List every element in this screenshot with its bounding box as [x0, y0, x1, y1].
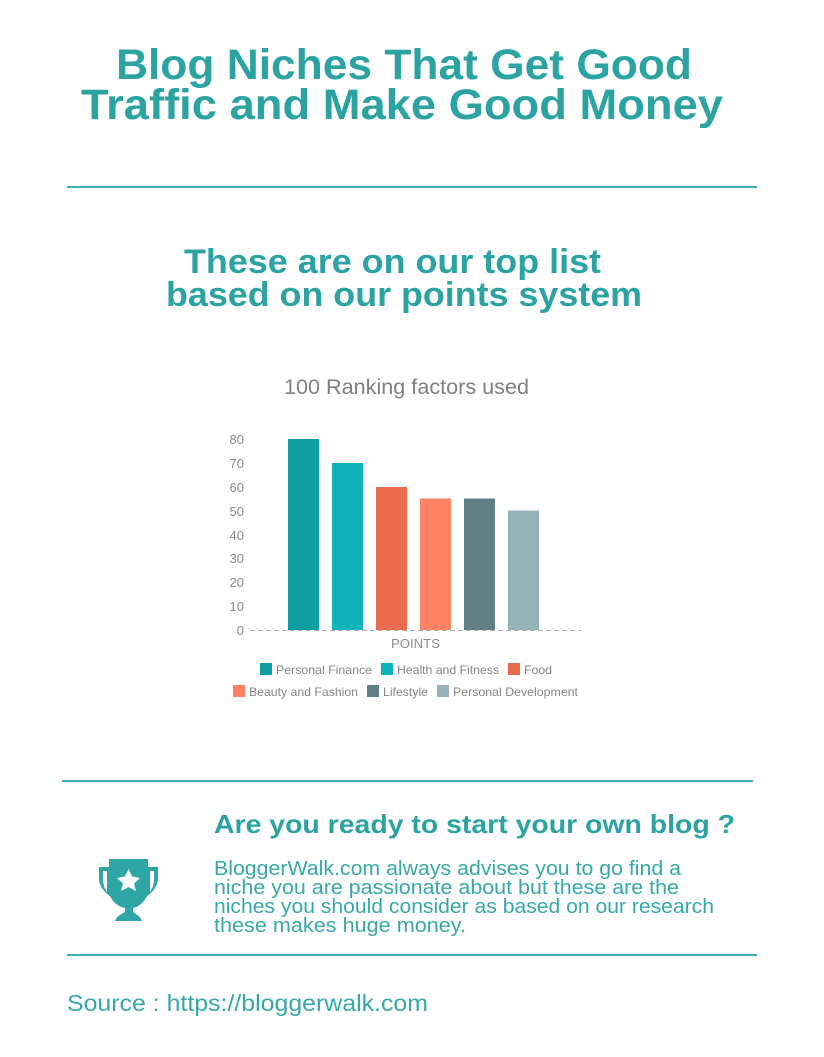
title: Blog Niches That Get Good: [116, 41, 692, 89]
y axis labels: 0: [237, 623, 244, 638]
call to action heading: Are you ready to start your own blog ?: [214, 809, 735, 839]
subheading: [166, 243, 642, 314]
source line: Source : https://bloggerwalk.com: [67, 990, 428, 1016]
y axis labels: [230, 432, 244, 638]
y axis labels: 30: [230, 551, 244, 566]
legend: Food: [524, 663, 552, 677]
title: Traffic and Make Good Money: [81, 81, 723, 129]
legend: Personal Development: [453, 685, 579, 699]
subheading: These are on our top list: [184, 243, 601, 281]
legend: Health and Fitness: [397, 663, 499, 677]
icon: trophy: [99, 859, 158, 921]
subheading: based on our points system: [166, 276, 642, 314]
legend: [233, 663, 579, 699]
x axis label: POINTS: [391, 636, 440, 651]
legend: Lifestyle: [383, 685, 428, 699]
body text: BloggerWalk.com always advises you to go find a: [214, 858, 682, 880]
y axis labels: 60: [230, 480, 244, 495]
bar chart: [230, 376, 581, 699]
body text: niches you should consider as based on our research: [214, 896, 714, 918]
legend: Beauty and Fashion: [249, 685, 358, 699]
body text: niche you are passionate about but these are the: [214, 877, 679, 899]
bars: [288, 439, 539, 630]
y axis labels: 10: [230, 599, 244, 614]
y axis labels: 50: [230, 504, 244, 519]
y axis labels: 80: [230, 432, 244, 447]
legend: Personal Finance: [276, 663, 372, 677]
y axis labels: 20: [230, 575, 244, 590]
y axis labels: 40: [230, 528, 244, 543]
body text: these makes huge money.: [214, 915, 466, 937]
y axis labels: 70: [230, 456, 244, 471]
body text: [214, 858, 714, 937]
title: [81, 41, 723, 129]
chart title: 100 Ranking factors used: [284, 376, 529, 399]
